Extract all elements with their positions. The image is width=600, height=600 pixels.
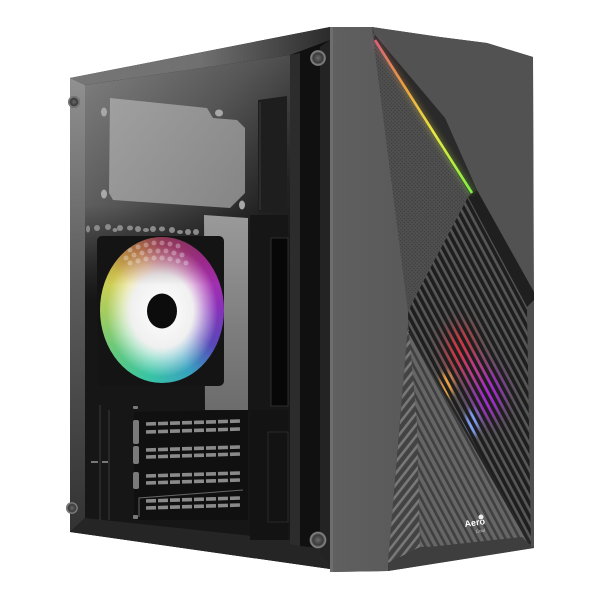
side glass panel base <box>70 27 330 569</box>
front bezel: mesh section <box>372 30 471 312</box>
right side pillars <box>290 40 330 565</box>
fan housing <box>97 236 224 386</box>
logo: AeroCool: Cool <box>475 528 485 534</box>
front bezel: plain left panel <box>330 27 408 572</box>
glass frame bottom <box>70 518 330 569</box>
light plate behind fan <box>204 215 248 410</box>
interior back wall <box>85 55 290 540</box>
glass frame left <box>70 78 85 532</box>
logo: AeroCool: Aero <box>464 516 486 529</box>
rear bracket detail <box>250 96 288 540</box>
front bezel: upper right panel <box>372 27 534 300</box>
front bezel: dark chamfer and band <box>374 35 534 307</box>
lower interior shade <box>85 205 290 540</box>
front bezel: dark grille with RGB glow <box>408 197 532 545</box>
RGB fan <box>100 237 224 383</box>
glass frame top <box>70 27 330 85</box>
front bezel: left grille strip <box>388 327 420 563</box>
vent holes above fan <box>86 224 199 235</box>
expansion slot covers <box>133 406 248 520</box>
illustration: PC case <box>66 27 534 572</box>
front bezel: right edge strip <box>527 300 534 548</box>
thumb screw: bottom right <box>310 532 326 548</box>
thumb screw: top left <box>68 96 80 108</box>
front bezel: light grille <box>409 331 530 547</box>
PSU shroud plate <box>101 98 245 210</box>
rear thin rails <box>91 405 109 520</box>
front bezel: bottom chamfer <box>388 537 533 571</box>
logo: AeroCool <box>464 514 486 534</box>
RGB light bar <box>375 40 472 193</box>
case front base silhouette <box>330 27 534 572</box>
grille divider line <box>409 331 530 544</box>
thumb screw: bottom left <box>66 502 78 514</box>
thumb screw: top right <box>310 50 326 66</box>
